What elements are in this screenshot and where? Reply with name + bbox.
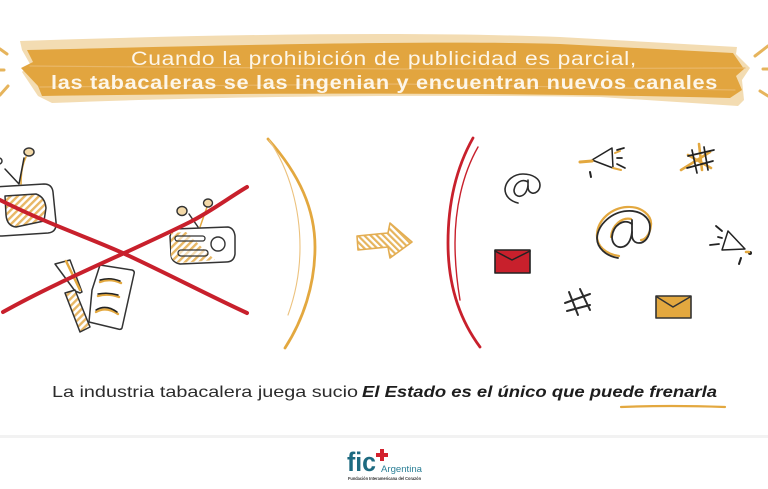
arrow [357,223,412,258]
logo: fic Argentina [347,447,423,481]
icon: hashtag dark [565,289,590,315]
gold bracket [268,139,315,348]
title line 1: Cuando la prohibición de publicidad es parcial, [131,49,637,70]
icon: television [0,148,56,236]
icon: hashtag gold [681,144,714,173]
icon: radio [170,199,235,264]
footer divider [0,435,768,438]
icon: at sign large [597,207,651,258]
icon: megaphone right [710,226,752,264]
logo wordmark: fic [347,447,376,477]
logo country: Argentina [381,464,423,475]
icon: newspaper and pencil [55,260,134,332]
icon: gold envelope [656,296,691,318]
red cross-out [0,187,247,313]
statement: La industria tabacalera juega sucio [52,384,358,401]
bottom message [52,384,725,407]
brush stroke background [20,34,750,106]
icon: megaphone top [580,148,625,177]
red bracket [448,138,480,347]
title banner [20,34,750,106]
icon: red envelope [495,250,530,273]
logo cross [376,449,388,461]
right burst lines [755,46,768,96]
title line 2: las tabacaleras se las ingenian y encuentran nuevos canales [51,73,718,94]
emphasised statement: El Estado es el único que puede frenarla [362,384,717,401]
icon: at sign small [505,174,540,203]
underline [621,406,725,407]
left burst lines [0,49,8,95]
logo caption: Fundación Interamericana del Corazón [348,476,421,481]
